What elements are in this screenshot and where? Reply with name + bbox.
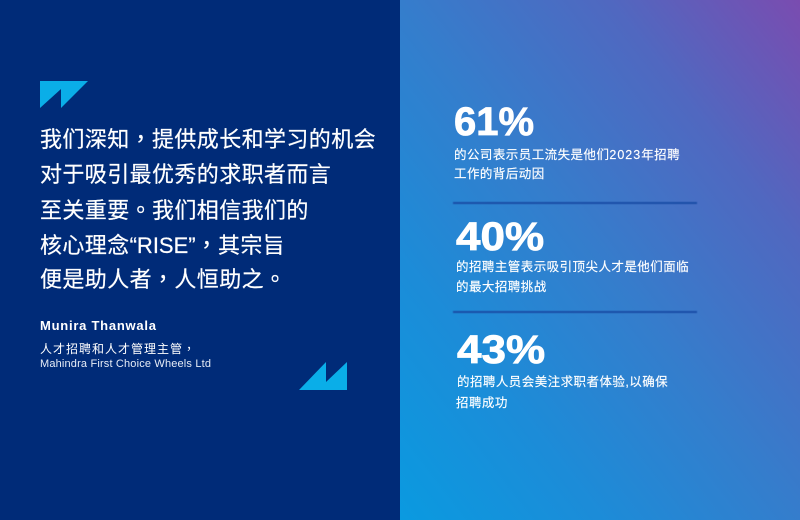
quote text: 至关重要。我们相信我们的	[40, 198, 309, 223]
quote text: 对于吸引最优秀的求职者而言	[40, 162, 331, 187]
stat: 61%: 61%	[454, 100, 534, 144]
quote text: 核心理念“RISE”，其宗旨	[40, 233, 285, 258]
attribution name: Munira Thanwala	[40, 318, 157, 333]
panel: statistics	[400, 0, 800, 520]
stat: 43%: 招聘成功	[456, 396, 508, 410]
stat: 43%: 43%	[457, 328, 545, 372]
stat: 43%	[456, 328, 668, 410]
icon: top logo mark	[40, 81, 88, 108]
attribution role	[40, 342, 211, 370]
attribution role: Mahindra First Choice Wheels Ltd	[40, 358, 211, 370]
quote text	[40, 127, 376, 292]
stat: 40%: 40%	[456, 215, 544, 259]
quote text: 我们深知，提供成长和学习的机会	[40, 127, 376, 152]
stat: 40%: 的最大招聘挑战	[456, 280, 547, 294]
stat: 40%: 的招聘主管表示吸引顶尖人才是他们面临	[456, 260, 689, 274]
stat: 43%: 的招聘人员会美注求职者体验,以确保	[457, 375, 668, 389]
stat: 40%	[456, 215, 689, 294]
panel: quote	[0, 0, 400, 520]
quote text: 便是助人者，人恒助之。	[40, 267, 286, 292]
stat: 61%	[454, 100, 680, 181]
stat: 61%: 工作的背后动因	[454, 167, 545, 181]
attribution role: 人才招聘和人才管理主管，	[40, 342, 196, 356]
stat: 61%: 的公司表示员工流失是他们2023年招聘	[454, 148, 680, 162]
icon: bottom logo mark	[299, 362, 347, 390]
